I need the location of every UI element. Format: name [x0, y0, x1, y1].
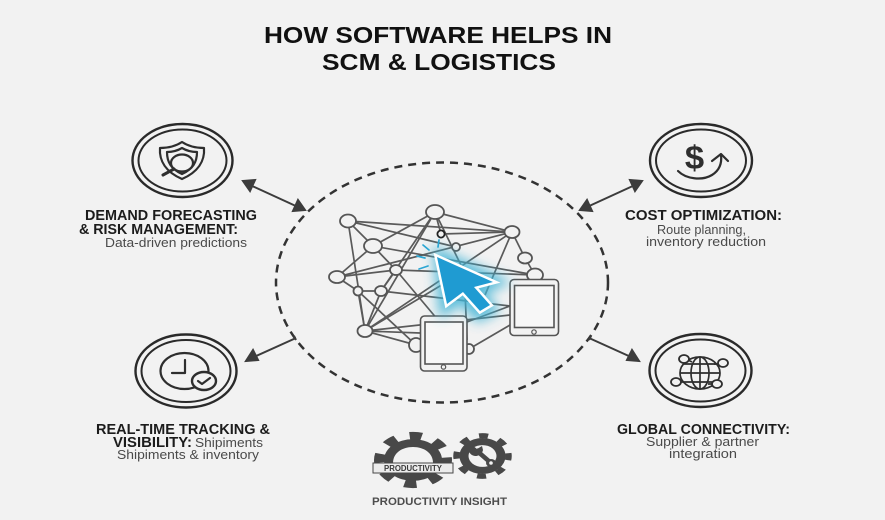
tablet right: [510, 280, 558, 336]
text: global connectivity: Supplier & partner: [646, 435, 759, 449]
text: real-time tracking: Shipiments & inventory: [117, 448, 260, 462]
icon: clock with check: [136, 334, 236, 408]
big gear: PRODUCTIVITY: [384, 464, 443, 473]
text: cost optimization: Route planning,: [657, 223, 746, 237]
text: real-time tracking: REAL-TIME TRACKING &: [96, 422, 271, 438]
arrow: bottom left: [246, 336, 296, 361]
text: real-time tracking: VISIBILITY:: [113, 435, 192, 451]
text: real-time tracking: Shipiments: [195, 436, 263, 450]
text: demand forecasting: & RISK MANAGEMENT:: [79, 222, 238, 238]
network graph: [329, 205, 543, 354]
small gear: [453, 433, 512, 479]
text: global connectivity: integration: [669, 447, 737, 461]
arrow: top left double: [243, 180, 305, 211]
text: global connectivity: [617, 422, 790, 461]
text: real-time tracking: [96, 422, 271, 462]
logo caption: PRODUCTIVITY INSIGHT: [372, 496, 507, 508]
title: SCM & LOGISTICS: [322, 49, 556, 75]
arrow: top right double: [580, 180, 642, 211]
logo: productivity gears: [373, 433, 512, 487]
icon: shield with magnifier: [132, 124, 232, 197]
icon: dollar with arrow: $: [685, 140, 704, 177]
icon: dollar with arrow: [650, 124, 752, 197]
text: cost optimization: COST OPTIMIZATION:: [625, 208, 782, 224]
arrow: bottom right: [589, 336, 639, 361]
text: cost optimization: [625, 208, 782, 249]
title: [264, 22, 612, 75]
text: demand forecasting: DEMAND FORECASTING: [85, 208, 257, 224]
tablet left: [420, 316, 467, 371]
icon: globe with nodes: [650, 334, 752, 407]
cursor with glow: [417, 240, 502, 318]
text: demand forecasting: [79, 208, 257, 250]
text: global connectivity: GLOBAL CONNECTIVITY:: [617, 422, 790, 438]
text: demand forecasting: Data-driven predictions: [105, 236, 247, 250]
title: HOW SOFTWARE HELPS IN: [264, 22, 612, 48]
dashed central circle: [276, 162, 608, 402]
text: cost optimization: inventory reduction: [646, 235, 766, 249]
